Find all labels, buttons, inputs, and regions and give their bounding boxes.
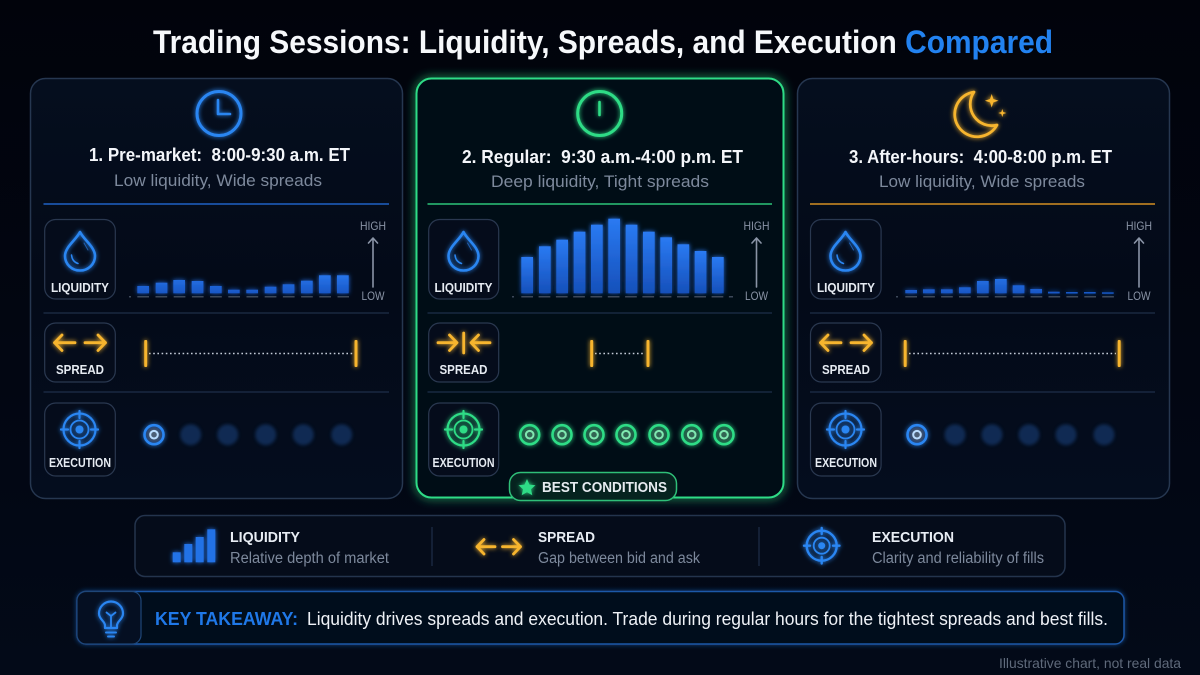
- axis: high to low: [744, 219, 770, 303]
- panel: pre-market: [30, 78, 402, 498]
- execution badge: EXECUTION: [815, 455, 877, 470]
- legend item: spread: SPREAD: [538, 529, 595, 546]
- execution dots: one of six: [144, 424, 352, 445]
- execution badge: EXECUTION: [49, 455, 111, 470]
- session heading: pre-market: 1. Pre-market: 8:00-9:30 a.m. ET: [89, 144, 351, 165]
- key takeaway: KEY TAKEAWAY:: [155, 608, 298, 629]
- axis: high to low: HIGH: [1126, 219, 1152, 233]
- axis: high to low: HIGH: [744, 219, 770, 233]
- legend item: liquidity: LIQUIDITY: [230, 529, 300, 546]
- session summary: regular: Deep liquidity, Tight spreads: [491, 172, 709, 191]
- liquidity badge: [45, 220, 115, 299]
- spread badge: [810, 323, 881, 382]
- axis: high to low: LOW: [1128, 289, 1151, 303]
- legend item: spread: [477, 529, 700, 567]
- spread badge: SPREAD: [56, 362, 104, 377]
- legend item: execution: EXECUTION: [872, 529, 954, 546]
- session summary: pre-market: Low liquidity, Wide spreads: [114, 171, 322, 190]
- panel: regular: [416, 78, 784, 500]
- spread gauge: wide: [904, 340, 1121, 367]
- legend item: execution: Clarity and reliability of fills: [872, 550, 1044, 567]
- title: Trading Sessions: Liquidity, Spreads, and Execution Compared: [153, 24, 1053, 60]
- bar chart: regular liquidity: [512, 219, 733, 298]
- footnote: Illustrative chart, not real data: [999, 655, 1181, 671]
- legend item: execution: [804, 528, 1044, 567]
- icon: star: [518, 479, 536, 495]
- badge: best conditions: BEST CONDITIONS: [542, 480, 667, 496]
- bar chart: after-hours liquidity: [896, 279, 1114, 298]
- panel: after-hours: [798, 78, 1170, 498]
- legend: [135, 516, 1065, 576]
- liquidity badge: LIQUIDITY: [434, 280, 493, 295]
- axis: high to low: HIGH: [360, 219, 386, 233]
- axis: high to low: LOW: [362, 289, 385, 303]
- execution dots: one of six: [908, 424, 1114, 445]
- execution badge: [45, 403, 115, 476]
- legend item: liquidity: [173, 529, 390, 567]
- icon: light bulb: [77, 592, 141, 644]
- axis: high to low: LOW: [745, 289, 769, 303]
- spread badge: SPREAD: [822, 362, 870, 377]
- icon: clock at open: [578, 92, 622, 136]
- liquidity badge: [429, 220, 499, 299]
- badge: best conditions: [510, 472, 676, 500]
- spread badge: SPREAD: [440, 362, 488, 377]
- spread gauge: tight: [590, 340, 650, 367]
- key takeaway: [77, 592, 1124, 644]
- session summary: after-hours: Low liquidity, Wide spreads: [879, 172, 1085, 191]
- execution dots: seven of seven: [520, 425, 734, 444]
- axis: high to low: [1126, 219, 1152, 303]
- execution badge: EXECUTION: [432, 455, 494, 470]
- spread badge: [45, 323, 115, 382]
- liquidity badge: LIQUIDITY: [51, 280, 109, 295]
- execution badge: [429, 403, 499, 476]
- liquidity badge: LIQUIDITY: [817, 280, 875, 295]
- bar chart: pre-market liquidity: [129, 275, 349, 298]
- spread badge: [429, 323, 499, 382]
- axis: high to low: [360, 219, 386, 303]
- session heading: regular: 2. Regular: 9:30 a.m.-4:00 p.m. ET: [462, 146, 744, 167]
- icon: moon and stars: [955, 92, 1006, 137]
- legend item: liquidity: Relative depth of market: [230, 550, 390, 567]
- legend item: spread: Gap between bid and ask: [538, 550, 700, 567]
- liquidity badge: [810, 220, 881, 299]
- session heading: after-hours: 3. After-hours: 4:00-8:00 p.m. ET: [849, 146, 1113, 167]
- key takeaway: Liquidity drives spreads and execution. Trade during regular hours for the tightest spreads and best fills.: [307, 609, 1108, 629]
- icon: clock: [197, 92, 241, 136]
- execution badge: [810, 403, 881, 476]
- spread gauge: wide: [144, 340, 358, 367]
